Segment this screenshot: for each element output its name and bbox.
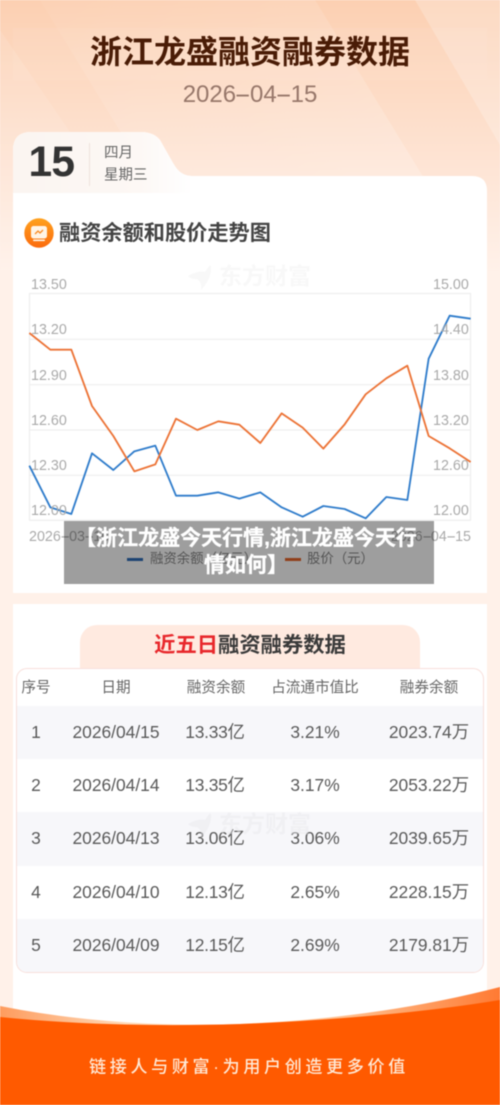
table header: 融资余额 xyxy=(187,680,245,696)
left axis labels: 12.00 xyxy=(31,503,67,519)
x axis start date: - xyxy=(60,529,70,545)
date subtitle: - xyxy=(235,81,251,108)
row 5: 2.69% xyxy=(290,935,340,955)
row 3: 3.06% xyxy=(290,828,340,848)
row 3: 2026/04/13 xyxy=(72,828,160,848)
table heading: 近五日融资融券数据 xyxy=(154,633,346,657)
row 5: 5 xyxy=(31,935,41,955)
footer slogan: 链接人与财富·为用户创造更多价值 xyxy=(89,1058,409,1076)
x axis end date: - xyxy=(422,529,432,545)
row 1 xyxy=(17,706,483,759)
table header: 日期 xyxy=(101,680,131,696)
row 2: 3.17% xyxy=(290,775,340,795)
row 2: 2 xyxy=(31,775,41,795)
title: 浙江龙盛融资融券数据 xyxy=(90,34,410,70)
x axis start date: 2026 03 16 xyxy=(29,529,109,545)
row 4: 2026/04/10 xyxy=(72,882,160,902)
left axis labels xyxy=(31,277,67,519)
chart heading: 融资余额和股价走势图 xyxy=(59,222,271,245)
x axis end date: - xyxy=(446,529,456,545)
panel: chart card with date tab xyxy=(12,132,488,593)
row 4 xyxy=(30,882,469,902)
right axis labels: 12.60 xyxy=(433,458,469,474)
legend: 股价（元） xyxy=(307,551,374,566)
row 5: 12.15亿 xyxy=(185,935,245,955)
row 5: 2179.81万 xyxy=(389,935,469,955)
watermark: chart xyxy=(187,262,315,290)
row 3 xyxy=(17,812,483,866)
series: financing balance xyxy=(29,316,471,518)
row 2 xyxy=(31,775,469,795)
table header xyxy=(21,678,458,696)
row 4: 4 xyxy=(31,882,41,902)
left axis labels: 13.50 xyxy=(31,277,67,293)
row 4: 2.65% xyxy=(290,882,340,902)
headline overlay banner xyxy=(64,521,434,584)
row 3: 13.06亿 xyxy=(185,828,245,848)
x axis start date: - xyxy=(84,529,94,545)
row 3: 2039.65万 xyxy=(389,828,469,848)
legend xyxy=(126,551,374,566)
row 1: 3.21% xyxy=(290,722,340,742)
right axis labels: 14.40 xyxy=(433,322,469,338)
x axis end date: 2026 04 15 xyxy=(391,529,471,545)
headline overlay banner: 【浙江龙盛今天行情,浙江龙盛今天行 xyxy=(75,527,417,550)
date tab: day number: 15 xyxy=(28,139,74,186)
date tab: month: 四月 xyxy=(104,146,133,162)
table header: 序号 xyxy=(21,680,51,696)
row 2: 2026/04/14 xyxy=(72,775,160,795)
left axis labels: 12.90 xyxy=(31,368,67,384)
row 2: 13.35亿 xyxy=(185,775,245,795)
row 4: 2228.15万 xyxy=(389,882,469,902)
legend: 融资余额（亿元） xyxy=(150,551,257,566)
row 3: 3 xyxy=(31,828,41,848)
date subtitle: 2026 04 15 xyxy=(183,81,317,108)
left axis labels: 13.20 xyxy=(31,322,67,338)
row 1: 13.33亿 xyxy=(185,722,245,742)
right axis labels: 12.00 xyxy=(433,503,469,519)
right axis labels: 15.00 xyxy=(433,277,469,293)
row 1: 2023.74万 xyxy=(389,722,469,742)
headline overlay banner: 情如何】 xyxy=(204,554,288,577)
right axis labels: 13.20 xyxy=(433,413,469,429)
left axis labels: 12.60 xyxy=(31,413,67,429)
icon: chart badge xyxy=(24,218,54,248)
line chart xyxy=(28,293,472,521)
table header: 融券余额 xyxy=(400,680,458,696)
table header: 占流通市值比 xyxy=(271,680,359,696)
row 4: 12.13亿 xyxy=(185,882,245,902)
row 1: 1 xyxy=(31,722,41,742)
watermark: chart: 东方财富 xyxy=(219,263,311,289)
row 5: 2026/04/09 xyxy=(72,935,160,955)
panel: five day table card xyxy=(13,604,487,1034)
left axis labels: 12.30 xyxy=(31,458,67,474)
table heading tab xyxy=(80,625,420,673)
row 1: 2026/04/15 xyxy=(72,722,160,742)
right axis labels: 13.80 xyxy=(433,368,469,384)
right axis labels xyxy=(433,277,469,519)
date tab: weekday: 星期三 xyxy=(104,168,148,184)
watermark: table: 东方财富 xyxy=(219,811,311,837)
series: share price xyxy=(29,333,471,471)
footer wave xyxy=(0,986,500,1105)
row 2: 2053.22万 xyxy=(389,775,469,795)
table xyxy=(16,668,484,973)
date subtitle: - xyxy=(275,81,292,108)
row 5 xyxy=(17,919,483,972)
